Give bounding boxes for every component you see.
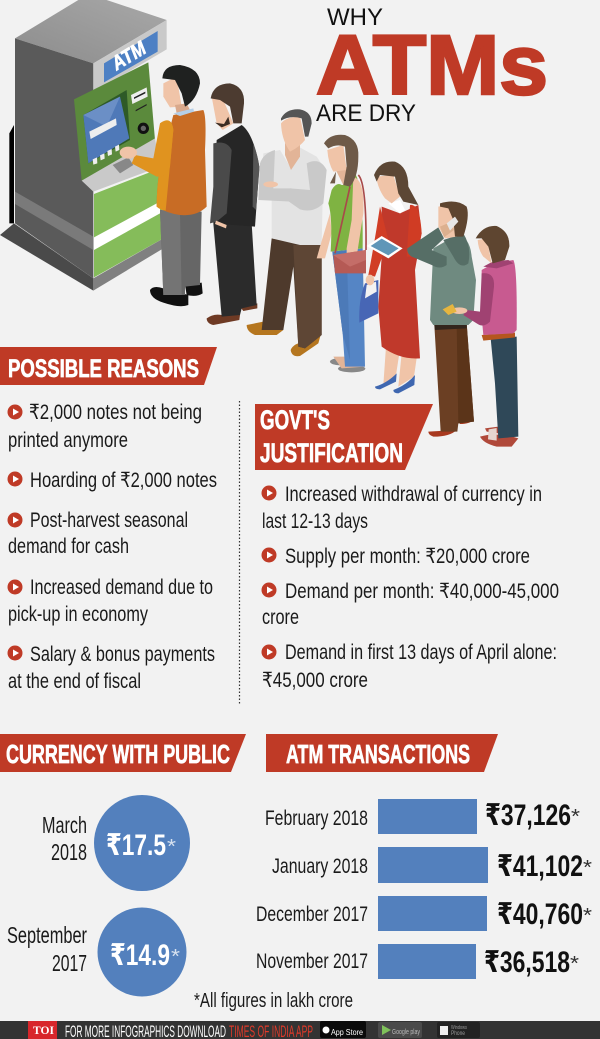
bar: February 2018: ₹37,126 (485, 799, 571, 832)
figure: man in white shirt (247, 109, 327, 356)
bar: February 2018: February 2018 (265, 807, 368, 830)
title: WHY (327, 4, 383, 31)
bar: February 2018: * (571, 806, 580, 828)
bar: December 2017: December 2017 (256, 903, 368, 926)
badge: Windows Phone (437, 1022, 480, 1038)
bullet item: notes not printed: printed anymore (8, 429, 128, 452)
heading: govt's justification: GOVT'S (260, 405, 330, 435)
badge: Windows Phone: Windows (451, 1025, 467, 1031)
title: ATMs (316, 18, 548, 112)
figure: man on phone in green hoodie (407, 201, 476, 437)
icon: ATM machine: ATM (107, 37, 150, 75)
bar: January 2018 (272, 847, 592, 883)
bullet item: economic pick-up: pick-up in economy (8, 603, 148, 626)
stat: September 2017: * (171, 946, 180, 968)
bullet item: salary and bonus: Salary & bonus payments (30, 643, 215, 666)
bullet item: monthly supply: Supply per month: ₹20,000 crore (285, 545, 530, 568)
bullet item: salary and bonus (8, 643, 215, 693)
logo: TOI (28, 1021, 57, 1039)
bullet item: economic pick-up (8, 576, 213, 626)
bullet item: post-harvest demand: demand for cash (8, 535, 129, 558)
bar: December 2017 (256, 896, 592, 931)
footer bar (0, 1021, 600, 1039)
figures: rest of the queue (317, 135, 518, 447)
bar: January 2018: * (583, 857, 592, 879)
stat: March 2018: March (42, 812, 87, 838)
bar: November 2017: ₹36,518 (484, 946, 570, 979)
bullet item: notes not printed: ₹2,000 notes not being (29, 401, 202, 424)
bullet item: post-harvest demand: Post-harvest seasonal (30, 509, 188, 532)
bullet item: economic pick-up: Increased demand due to (30, 576, 213, 599)
bar: January 2018: January 2018 (272, 855, 368, 878)
illustration: queue at ATM (0, 0, 518, 447)
icon: ATM machine (0, 0, 167, 291)
heading: ATM transactions: ATM TRANSACTIONS (286, 739, 470, 769)
heading: possible reasons: POSSIBLE REASONS (8, 355, 199, 383)
figure: man in dark suit (207, 83, 259, 325)
bullet item: post-harvest demand (8, 509, 188, 558)
bar: December 2017: * (583, 905, 592, 927)
panel: govt's justification list (262, 483, 559, 692)
title: ARE DRY (316, 100, 416, 127)
figure: man in orange sweater (120, 65, 207, 306)
bullet item: monthly demand (262, 580, 559, 629)
stat: September 2017: September (7, 922, 87, 948)
chart: ATM transactions bars (256, 799, 592, 979)
stat: March 2018: * (167, 836, 176, 858)
stat: September 2017: ₹14.9 (110, 939, 170, 972)
bullet item: April demand (262, 641, 557, 692)
bullet item: monthly demand: crore (262, 606, 299, 629)
bar: November 2017 (256, 944, 579, 979)
bar: February 2018 (265, 799, 580, 834)
stat: September 2017: 2017 (52, 950, 87, 976)
stat: March 2018: 2018 (51, 839, 87, 865)
badge: Windows Phone: Phone (451, 1031, 466, 1037)
heading: possible reasons (0, 347, 217, 385)
badge: App Store: App Store (331, 1028, 363, 1037)
bullet item: notes not printed (8, 401, 202, 452)
heading: ATM transactions (266, 734, 498, 772)
bullet item: April demand: ₹45,000 crore (262, 669, 368, 692)
bullet item: salary and bonus: at the end of fiscal (8, 670, 141, 693)
heading: currency with public (0, 734, 246, 772)
stat: March 2018 (42, 795, 190, 891)
heading: currency with public: CURRENCY WITH PUBLIC (6, 739, 230, 769)
chart: currency with public circles (7, 795, 190, 996)
panel: possible reasons list (8, 401, 217, 693)
logo: TOI: TOI (33, 1023, 54, 1037)
heading: govt's justification (255, 404, 433, 470)
bar: November 2017: * (570, 953, 579, 975)
bullet item: hoarding: Hoarding of ₹2,000 notes (30, 469, 217, 492)
heading: govt's justification: JUSTIFICATION (260, 438, 403, 468)
figure: woman with green top (317, 135, 366, 372)
badge: Google play: Google play (392, 1029, 420, 1036)
stat: September 2017 (7, 908, 186, 996)
badge: App Store (320, 1021, 366, 1038)
bar: November 2017: November 2017 (256, 950, 368, 973)
footnote: *All figures in lakh crore (194, 990, 353, 1012)
figure: boy in pink with card (443, 226, 518, 447)
bullet item: increased withdrawal: last 12-13 days (262, 510, 368, 533)
bullet item: increased withdrawal (262, 483, 542, 533)
badge: Google play (378, 1022, 422, 1038)
figure: woman in red dress (359, 161, 422, 393)
stat: March 2018: ₹17.5 (106, 829, 166, 862)
